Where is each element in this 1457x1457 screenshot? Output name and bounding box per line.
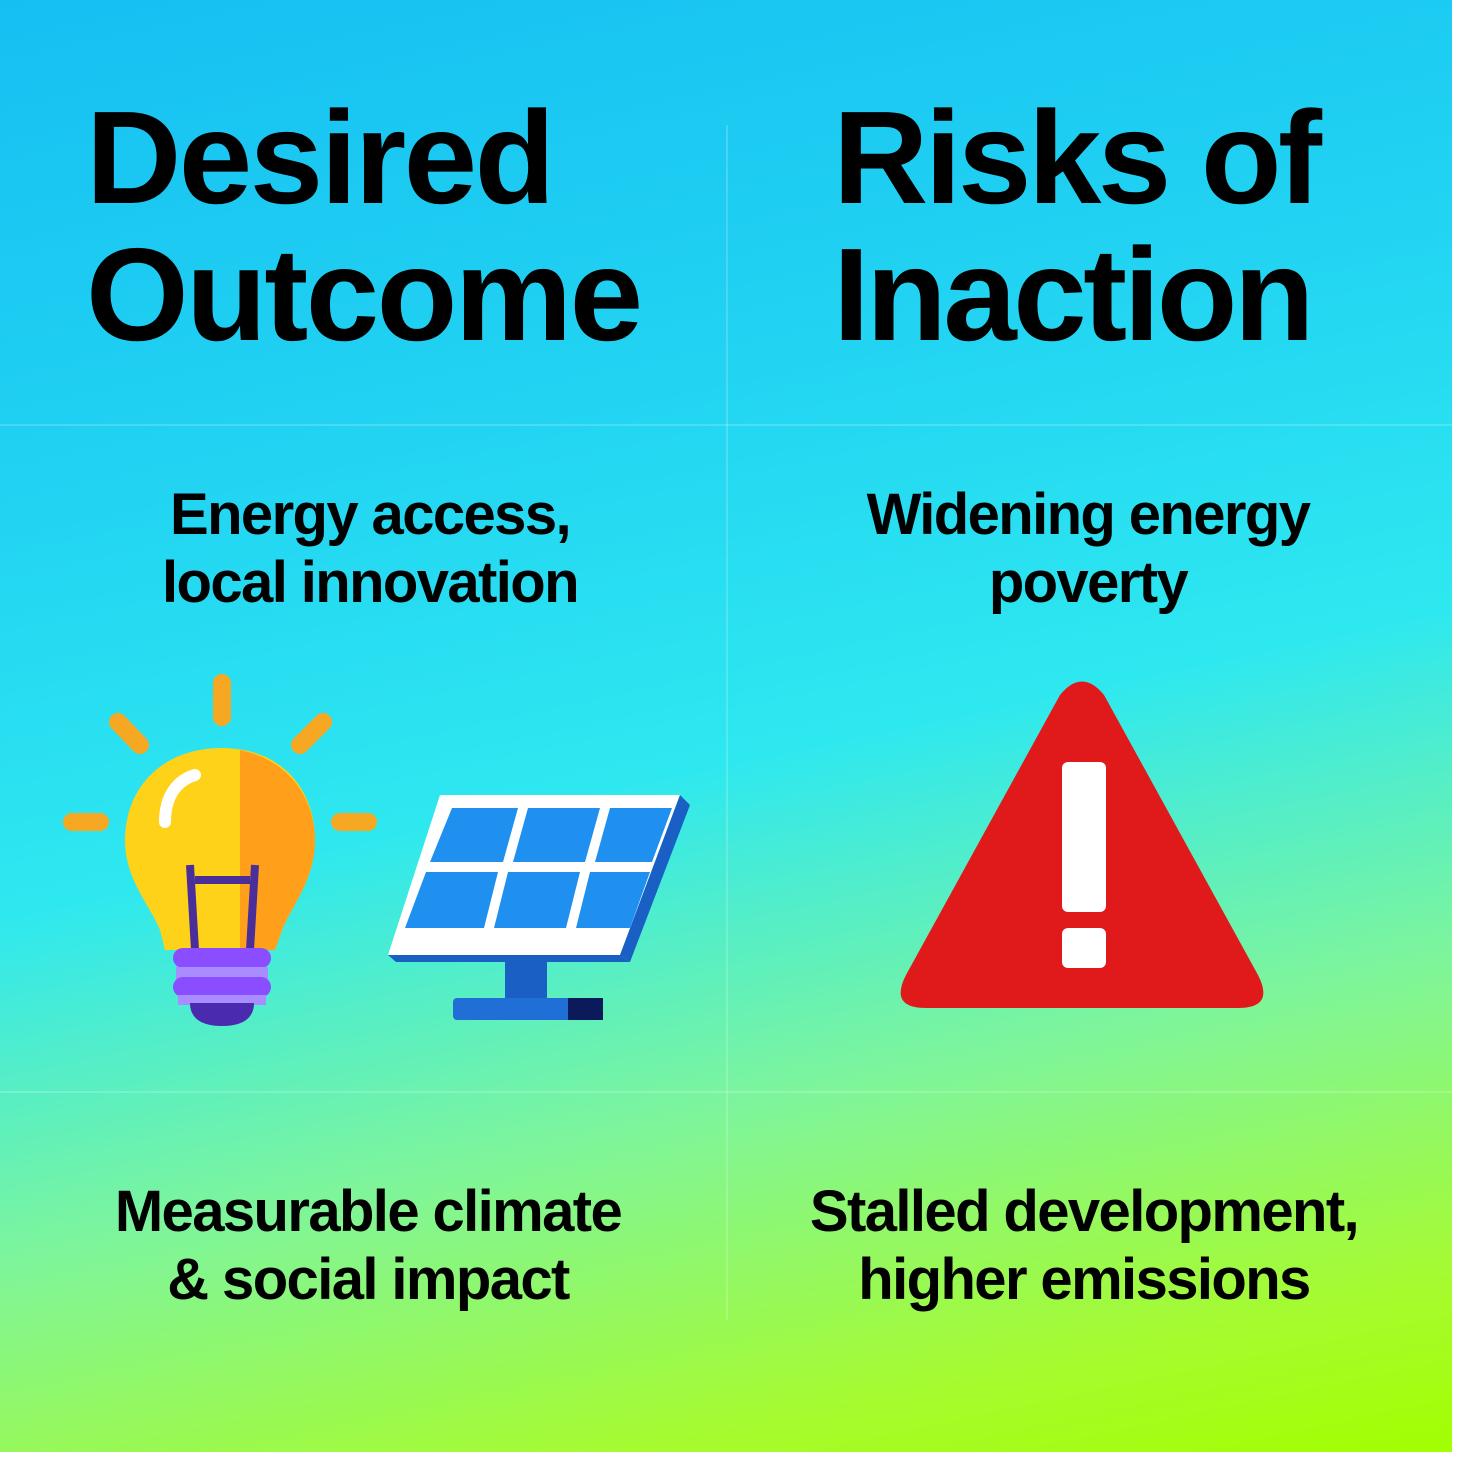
text: stalled development: Stalled development, (810, 1179, 1358, 1244)
text: energy access: Energy access, (170, 482, 570, 547)
icon: light bulb (63, 674, 377, 1026)
text: measurable impact (115, 1179, 621, 1312)
text: stalled development (810, 1179, 1358, 1312)
text: widening energy poverty: poverty (989, 550, 1187, 615)
icon: warning triangle (900, 682, 1264, 1008)
title: desired outcome (86, 84, 641, 368)
icon: solar panel (388, 795, 690, 1020)
text: stalled development: higher emissions (858, 1247, 1310, 1312)
text: energy access: local innovation (162, 550, 578, 615)
text: widening energy poverty: Widening energy (867, 482, 1309, 547)
title: desired outcome: Desired (86, 84, 553, 231)
text: measurable impact: & social impact (167, 1247, 569, 1312)
title: risks of inaction (833, 84, 1322, 368)
title: desired outcome: Outcome (86, 221, 641, 368)
title: risks of inaction: Inaction (833, 221, 1311, 368)
text: widening energy poverty (866, 482, 1311, 615)
text: energy access (162, 482, 578, 615)
text: measurable impact: Measurable climate (115, 1179, 621, 1244)
title: risks of inaction: Risks of (833, 84, 1318, 231)
